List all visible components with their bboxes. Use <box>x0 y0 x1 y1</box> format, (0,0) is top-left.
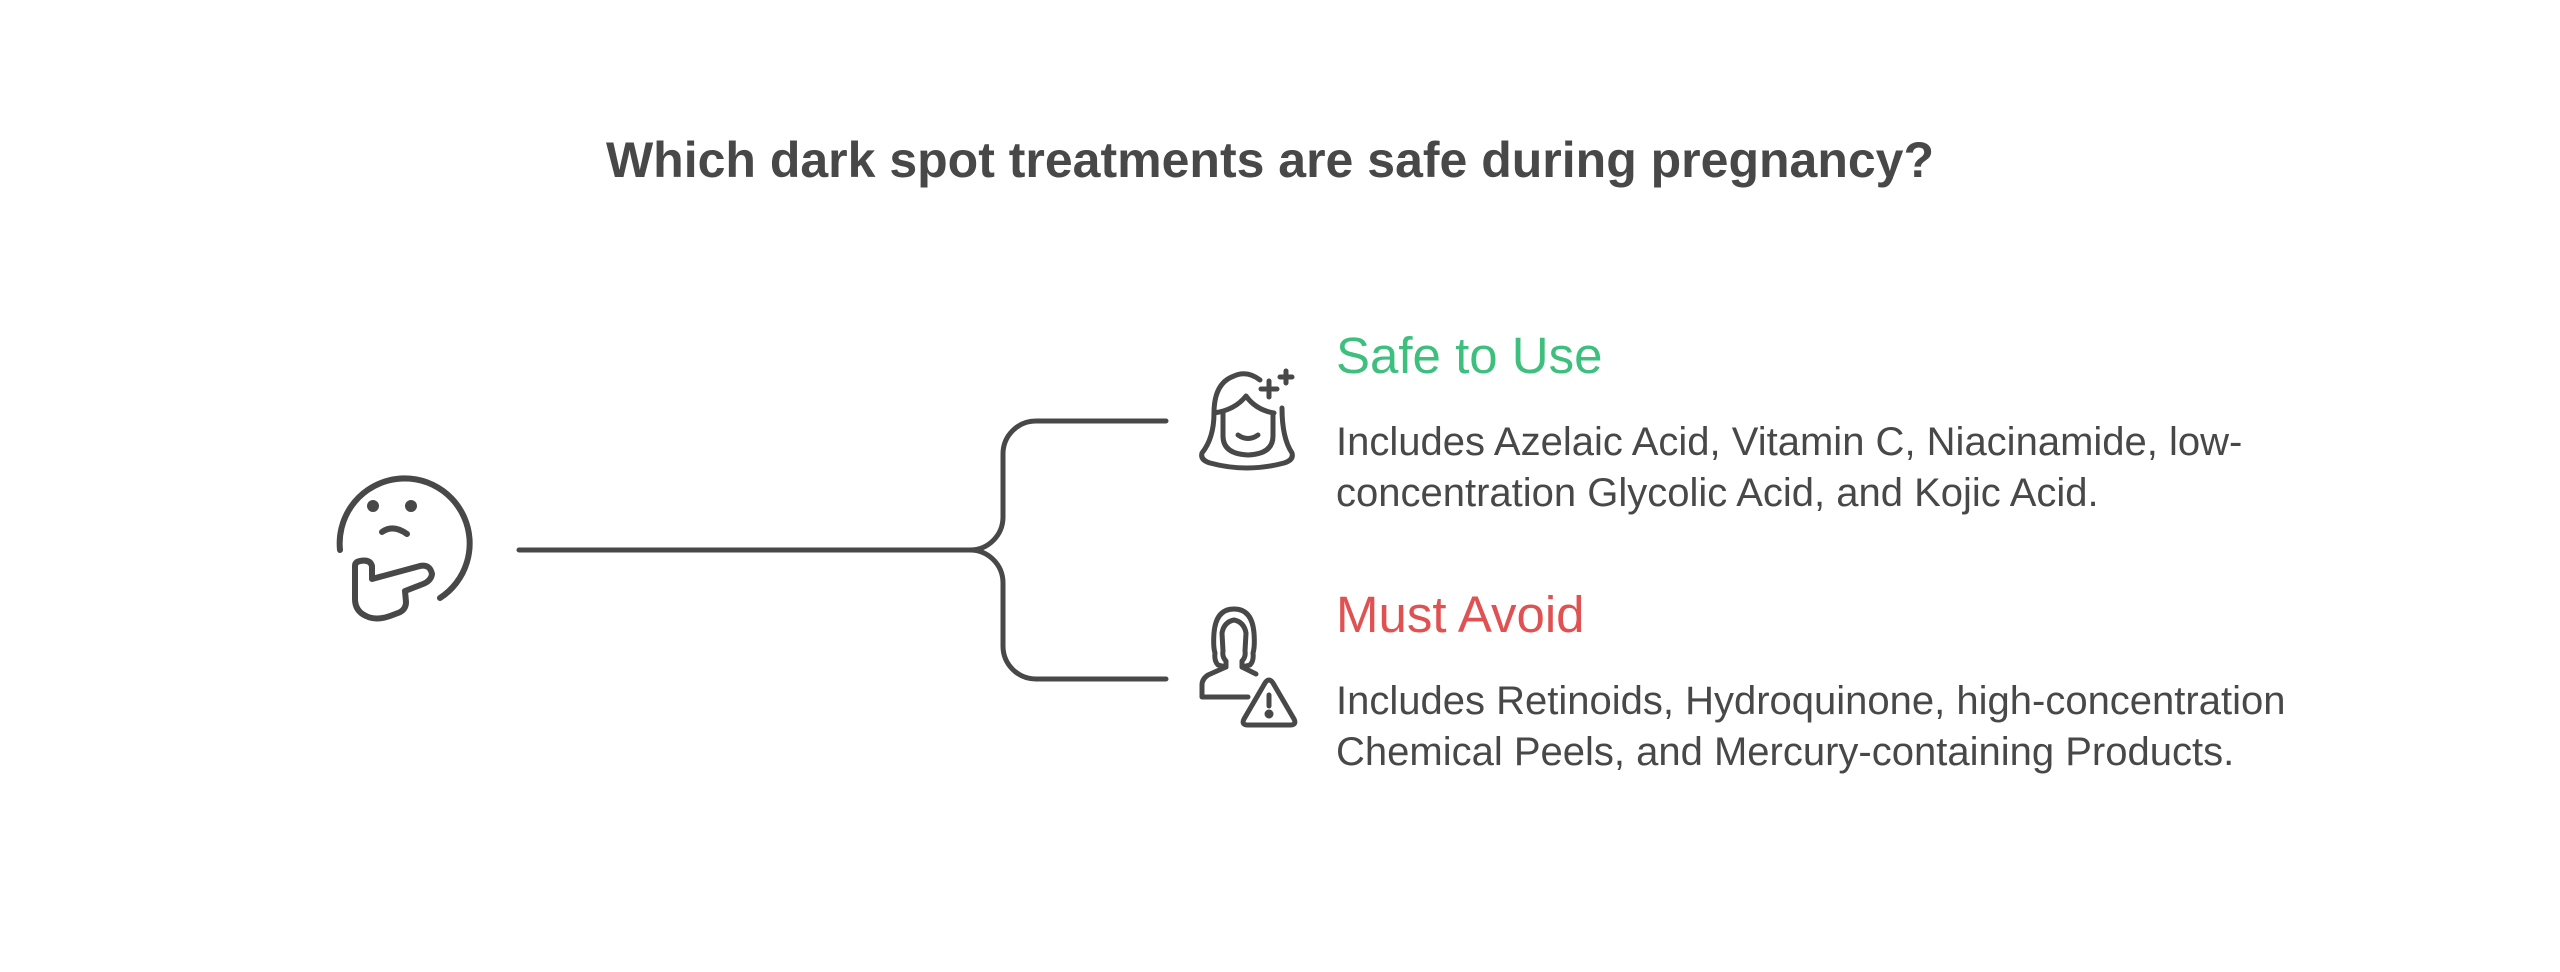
heading: Must Avoid: Must Avoid <box>1336 586 1585 643</box>
heading: Safe to Use: Safe to Use <box>1336 327 1602 384</box>
text: safe list: Includes Azelaic Acid, Vitamin C, Niacinamide, low- <box>1336 420 2242 464</box>
icon: happy woman with sparkles <box>1199 368 1295 470</box>
text: avoid list <box>1336 679 2285 774</box>
title: Which dark spot treatments are safe during pregnancy? <box>606 132 1934 188</box>
text: safe list: concentration Glycolic Acid, and Kojic Acid. <box>1336 471 2099 515</box>
icon: thinking face <box>336 475 473 622</box>
icon: woman with warning <box>1200 606 1298 728</box>
text: avoid list: Includes Retinoids, Hydroquinone, high-concentration <box>1336 679 2285 723</box>
text: avoid list: Chemical Peels, and Mercury-containing Products. <box>1336 730 2234 774</box>
text: safe list <box>1336 420 2242 515</box>
